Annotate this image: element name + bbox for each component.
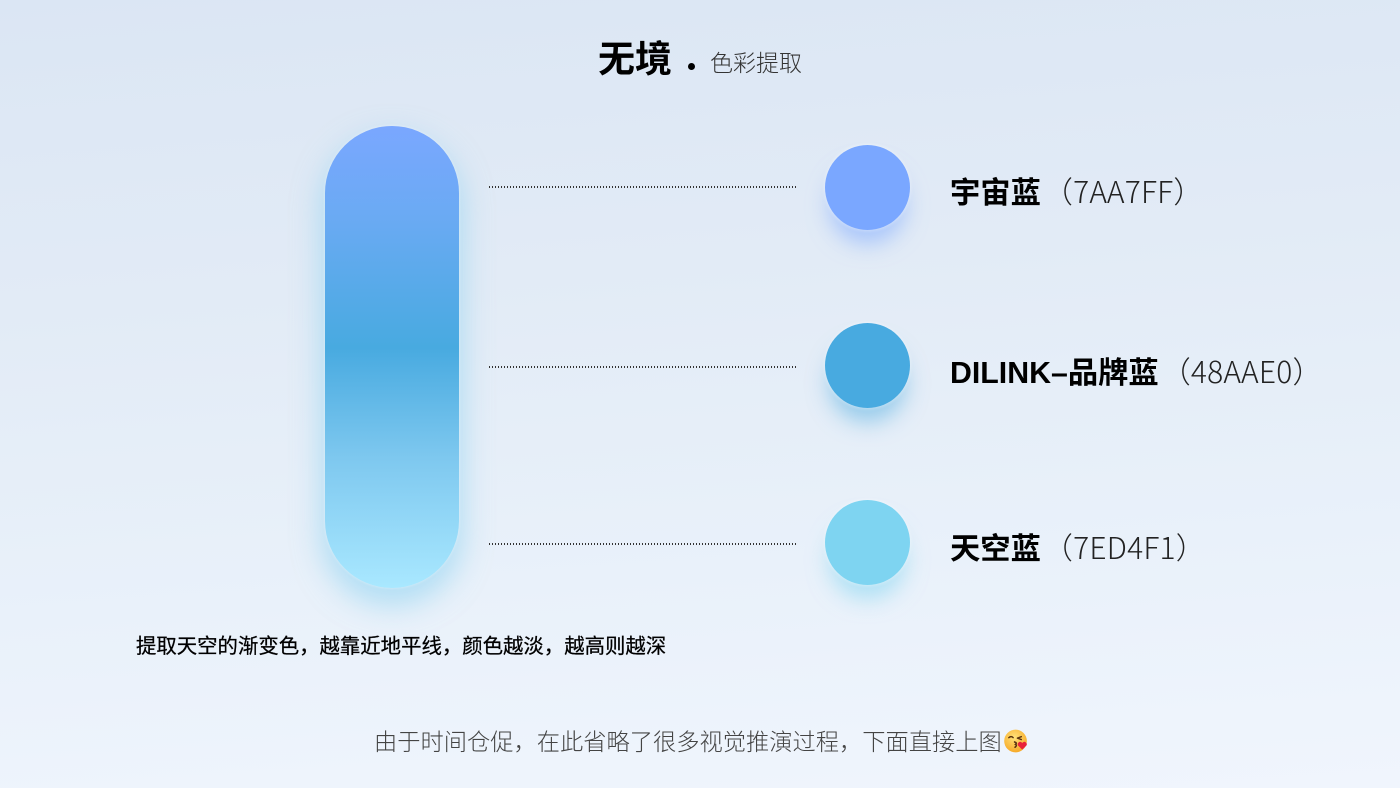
swatch: 品牌蓝 — [825, 323, 910, 408]
label: 宇宙蓝: 宇宙蓝（7AA7FF） — [950, 168, 1204, 212]
gradient capsule — [325, 126, 459, 588]
dotted line 3 — [489, 543, 797, 545]
title sub: 色彩提取 — [710, 44, 802, 78]
caption: 提取天空的渐变色，越靠近地平线，颜色越淡，越高则越深 — [136, 629, 666, 659]
swatch: 宇宙蓝 — [825, 145, 910, 230]
title dot — [688, 63, 695, 70]
title — [598, 29, 802, 83]
label: 天空蓝: 天空蓝（7ED4F1） — [950, 524, 1206, 568]
footer note: 由于时间仓促，在此省略了很多视觉推演过程，下面直接上图 — [374, 723, 1002, 757]
title main: 无境 — [598, 29, 672, 83]
dotted line 1 — [489, 186, 797, 188]
label: DILINK-品牌蓝: DILINK–品牌蓝（48AAE0） — [950, 348, 1323, 392]
icon: kissing emoji — [1004, 730, 1027, 752]
dotted line 2 — [489, 366, 797, 368]
swatch: 天空蓝 — [825, 500, 910, 585]
